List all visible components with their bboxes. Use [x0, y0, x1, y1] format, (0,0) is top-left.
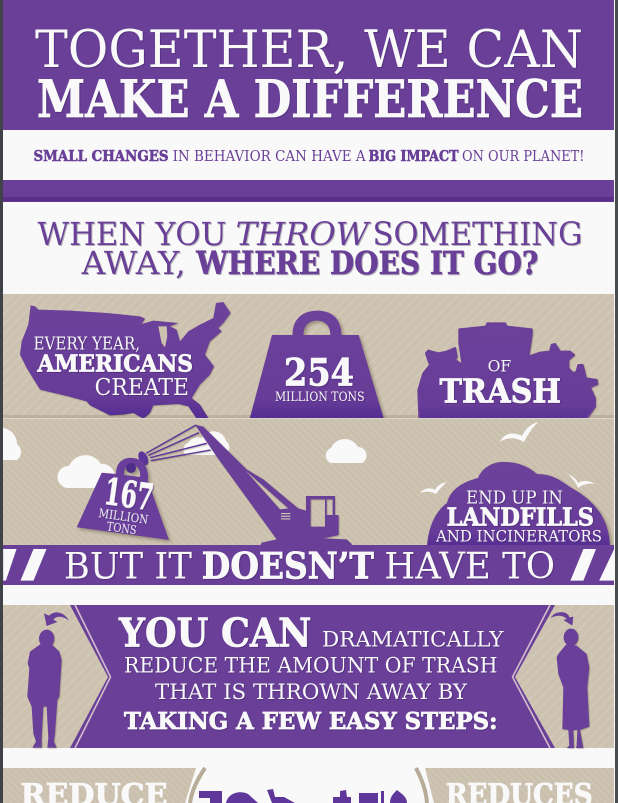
subtitle strip — [34, 147, 584, 165]
crane cables — [146, 425, 211, 461]
panel: reduce — [3, 768, 614, 803]
subtitle strip: IN BEHAVIOR CAN HAVE A — [173, 147, 366, 165]
section heading: WHERE DOES IT GO? — [195, 244, 538, 282]
landfill text: LANDFILLS — [447, 503, 594, 532]
panel: you can — [3, 605, 614, 748]
map text: CREATE — [95, 375, 189, 401]
purple ribbon — [70, 605, 555, 748]
header banner — [3, 0, 614, 130]
banner text — [64, 544, 555, 587]
panel: landfills — [3, 419, 614, 551]
trash text: TRASH — [440, 372, 561, 411]
trash text: OF — [488, 357, 511, 376]
map text — [34, 336, 193, 396]
section heading: WHEN YOU — [38, 215, 226, 253]
weight text — [98, 477, 154, 536]
landfill text: AND INCINERATORS — [435, 527, 602, 546]
section heading: THROW — [236, 215, 372, 253]
arrow right — [551, 612, 573, 626]
weight text — [276, 357, 365, 402]
map of the USA — [20, 302, 233, 419]
weight text: 167 — [102, 471, 156, 519]
person right — [557, 629, 589, 748]
panel: trash created each year — [3, 294, 614, 425]
striped banner — [3, 544, 614, 587]
ribbon text — [118, 611, 504, 735]
banner text: DOESN’T — [202, 544, 374, 587]
landfill text: END UP IN — [466, 489, 563, 509]
map text: EVERY YEAR, — [34, 334, 140, 354]
trash can and bags — [418, 323, 597, 425]
ribbon text: THAT IS THROWN AWAY BY — [155, 680, 468, 705]
circle centre — [185, 768, 434, 803]
crane claw — [138, 451, 150, 466]
subtitle strip: ON OUR PLANET! — [462, 147, 584, 165]
trash text — [439, 360, 561, 404]
title line 1: TOGETHER, WE CAN — [35, 21, 583, 80]
weight 254 — [249, 311, 384, 421]
banner text: HAVE TO — [384, 544, 555, 587]
weight 167 — [77, 458, 169, 540]
ribbon text: YOU CAN — [118, 611, 311, 657]
icons: household items — [199, 789, 407, 803]
crane body — [195, 425, 353, 551]
landfill mound — [427, 462, 610, 548]
person left — [27, 630, 62, 748]
subtitle strip: SMALL CHANGES — [34, 147, 168, 165]
weight text: TONS — [106, 519, 138, 538]
section heading: SOMETHING — [372, 215, 582, 253]
arrow left — [44, 612, 69, 626]
weight text: MILLION TONS — [275, 390, 365, 405]
clouds — [3, 428, 366, 488]
purple divider band — [3, 180, 614, 202]
ribbon text: REDUCE THE AMOUNT OF TRASH — [124, 654, 498, 679]
map text: AMERICANS — [37, 351, 193, 378]
weight text: MILLION — [98, 506, 149, 527]
section heading: AWAY, — [81, 244, 186, 282]
crane — [136, 425, 353, 551]
weight text: 254 — [284, 351, 354, 395]
banner text: BUT IT — [64, 544, 192, 587]
landfill text — [435, 489, 602, 546]
ribbon text: TAKING A FEW EASY STEPS: — [124, 708, 498, 735]
birds — [420, 422, 595, 494]
ribbon text: DRAMATICALLY — [322, 628, 504, 653]
section heading — [38, 215, 582, 282]
subtitle strip: BIG IMPACT — [369, 147, 459, 165]
